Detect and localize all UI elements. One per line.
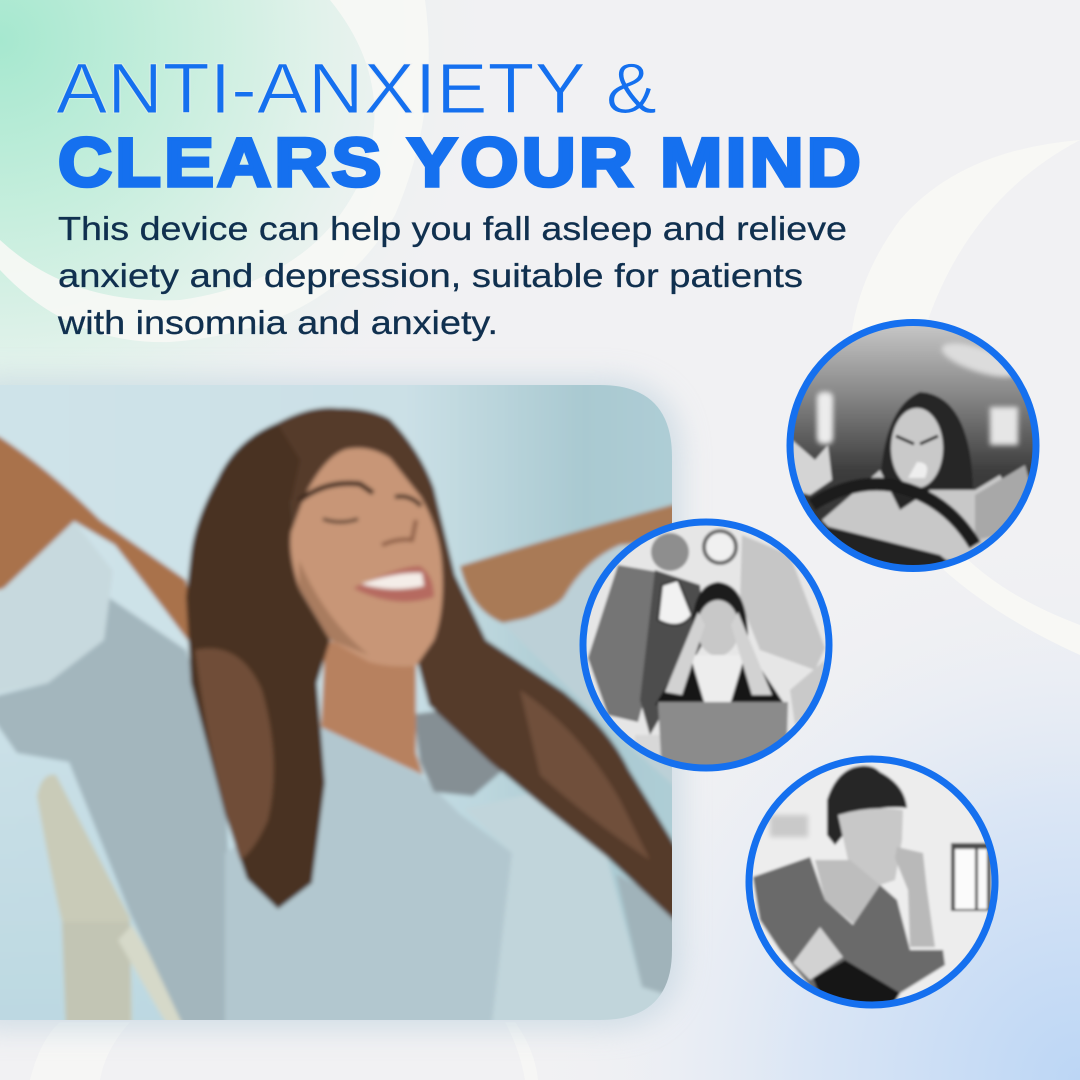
far arm: [460, 500, 690, 623]
title line: anti-anxiety: ANTI-ANXIETY &: [56, 50, 657, 129]
circle photo: angry driver: [786, 319, 1040, 572]
megaphone: [658, 580, 692, 625]
description text: [57, 210, 847, 341]
main photo: relaxed woman: [0, 375, 690, 1040]
chair: [37, 775, 132, 1030]
upper sleeve: [0, 597, 235, 1040]
photo shadow: [0, 378, 682, 1030]
rolled cuff: [0, 521, 113, 692]
description text: This device can help you fall asleep and relieve: [58, 210, 847, 247]
circle photo: stressed office worker: [580, 518, 832, 772]
description text: with insomnia and anxiety.: [57, 304, 498, 341]
neck: [321, 640, 423, 775]
hair highlights: [195, 648, 274, 860]
jacket: [753, 857, 945, 993]
laptop: [658, 702, 788, 775]
shirt: [822, 470, 1020, 560]
raised arm: [0, 430, 195, 650]
table: [636, 735, 661, 756]
background woman with megaphone: [588, 565, 660, 722]
right hand: [975, 465, 1032, 540]
title line: clears your mind: CLEARS YOUR MIND: [58, 124, 864, 201]
face: [290, 448, 443, 666]
clock: [704, 531, 736, 563]
eyebrows: [299, 483, 373, 501]
circle photo: woman with headache: [746, 756, 998, 1008]
centre woman: [692, 582, 748, 640]
nose: [382, 520, 416, 545]
hair main: [277, 408, 690, 935]
far sleeve: [527, 540, 672, 783]
neck: [815, 860, 880, 925]
black top: [812, 959, 901, 1002]
steering wheel: [812, 484, 975, 545]
shirt torso: [225, 727, 512, 1040]
title: [56, 50, 864, 201]
wall: [0, 385, 672, 954]
window: [951, 843, 991, 911]
hair: [827, 766, 907, 845]
face: [838, 808, 903, 885]
smile: [353, 566, 434, 602]
hand with glasses: [793, 927, 843, 980]
eye: [323, 519, 358, 522]
left hand: [792, 440, 832, 495]
forearm and hand: [895, 847, 935, 947]
right person: [740, 535, 825, 670]
description text: anxiety and depression, suitable for patients: [58, 257, 803, 294]
collar: [414, 710, 503, 796]
